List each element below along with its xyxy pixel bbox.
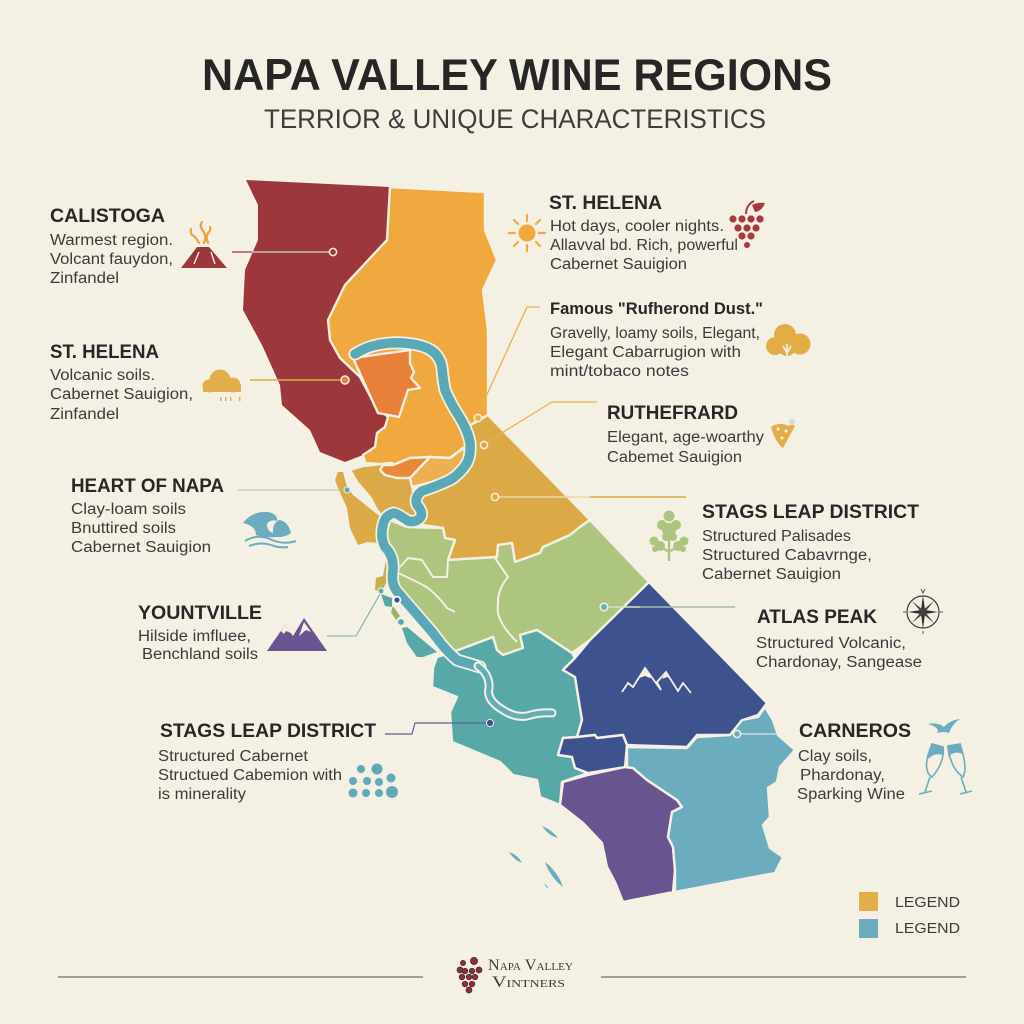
- marker: white ringed navy dot: [394, 597, 400, 603]
- callout: Calistoga: Zinfandel: [50, 270, 119, 287]
- leader: Famous Rutherford Dust: [474, 307, 540, 422]
- icon: mountains on blue region: [622, 668, 691, 693]
- region: gold west coast strip: [335, 472, 384, 545]
- callout: Calistoga: Warmest region.: [50, 232, 173, 249]
- logo: wordmark: [488, 957, 573, 991]
- callout: Yountville: YOUNTVILLE: [138, 602, 262, 624]
- callout: Rutherford: RUTHEFRARD: [607, 402, 738, 424]
- callout: Stags Leap west: is minerality: [158, 786, 246, 803]
- island three: [545, 862, 563, 887]
- callout: Stags Leap east: STAGS LEAP DISTRICT: [702, 501, 919, 523]
- marker: small teal dot: [398, 619, 404, 625]
- icon: mineral bubbles: [348, 764, 398, 798]
- map of regions: [243, 180, 795, 902]
- island four: [544, 883, 549, 888]
- callout: Stags Leap east: Structured Cabavrnge,: [702, 547, 872, 564]
- callout: St. Helena west: ST. HELENA: [50, 341, 159, 363]
- region: gold west: [350, 463, 420, 522]
- region: teal coastal strip: [402, 627, 437, 657]
- region: blue: [563, 582, 767, 747]
- region: dark orange pocket: [353, 350, 420, 417]
- icon: leaf: [650, 510, 688, 561]
- logo: grape mark: [457, 957, 482, 993]
- callout: Atlas Peak: Chardonay, Sangease: [756, 654, 922, 671]
- callout: Stags Leap west: [158, 720, 376, 803]
- callout: Famous Rutherford Dust: [550, 299, 763, 380]
- callout: Carneros: Clay soils,: [798, 748, 872, 765]
- callout: St. Helena east: [549, 192, 738, 273]
- callout: St. Helena west: Volcanic soils.: [50, 367, 155, 384]
- green inner borders: [398, 558, 517, 642]
- callout: St. Helena west: Zinfandel: [50, 406, 119, 423]
- callout: Calistoga: CALISTOGA: [50, 205, 165, 227]
- callout: Atlas Peak: ATLAS PEAK: [757, 606, 877, 628]
- callout: Stags Leap west: Structued Cabemion with: [158, 767, 342, 784]
- legend swatch gold: [859, 892, 878, 911]
- title: NAPA VALLEY WINE REGIONS: [202, 51, 832, 100]
- region: small blue: [558, 735, 627, 773]
- callout: Carneros: [797, 720, 911, 803]
- callout: Stags Leap west: Structured Cabernet: [158, 748, 309, 765]
- icon: compass: [903, 589, 943, 634]
- callout: Rutherford: Cabemet Sauigion: [607, 449, 742, 466]
- region: small orange patch: [380, 457, 430, 478]
- legend: [859, 892, 960, 938]
- region: green: [385, 520, 649, 655]
- callout: Heart of Napa: Bnuttired soils: [71, 520, 176, 537]
- logo: wordmark: Vintners: [492, 974, 565, 991]
- icon: toasting glasses: [919, 744, 972, 794]
- logo: wordmark: Napa Valley: [488, 957, 573, 974]
- icon: volcano: [181, 222, 227, 268]
- callout: Heart of Napa: Clay-loam soils: [71, 501, 186, 518]
- callout: St. Helena east: Cabernet Sauigion: [550, 256, 687, 273]
- islands: [509, 826, 563, 888]
- callout: Famous Rutherford Dust: mint/tobaco notes: [550, 363, 689, 380]
- region: coastal gold sliver: [375, 560, 388, 592]
- callout: Atlas Peak: Structured Volcanic,: [756, 635, 906, 652]
- leader: Heart of Napa: [238, 487, 350, 493]
- callout: Heart of Napa: Cabernet Sauigion: [71, 539, 211, 556]
- river lower: [478, 666, 552, 716]
- leader: Calistoga: [232, 248, 337, 256]
- river upper: [355, 343, 480, 667]
- leader: St. Helena west: [250, 376, 349, 384]
- icon: grapes: [729, 201, 765, 248]
- icon: sun: [509, 215, 545, 251]
- callout: St. Helena west: [50, 341, 193, 423]
- callout: Yountville: Hilside imfluee,: [138, 628, 251, 645]
- callout: St. Helena east: Hot days, cooler nights.: [550, 218, 724, 235]
- callout: St. Helena east: Allavval bd. Rich, powerful: [550, 237, 738, 254]
- icon: purple mountains: [267, 618, 327, 651]
- callout: Stags Leap east: Structured Palisades: [702, 528, 851, 545]
- region: red north: [243, 180, 390, 462]
- region: orange upper: [328, 187, 497, 465]
- callout: St. Helena west: Cabernet Sauigion,: [50, 386, 193, 403]
- callout: Carneros: Phardonay,: [800, 767, 885, 784]
- callout: Yountville: Benchland soils: [142, 646, 258, 663]
- island one: [542, 826, 558, 838]
- region: light orange patch: [410, 448, 467, 487]
- leader: Stags Leap east: [491, 493, 686, 501]
- region: light blue: [627, 707, 795, 892]
- callout: Stags Leap east: Cabernet Sauigion: [702, 566, 841, 583]
- callout: Calistoga: [50, 205, 173, 287]
- leader: Carneros: [733, 730, 778, 738]
- region: coastal olive patch: [391, 606, 400, 620]
- callout: Heart of Napa: [71, 475, 224, 556]
- callout: Carneros: CARNEROS: [799, 720, 911, 742]
- icon: wave: [243, 512, 296, 547]
- legend label one: LEGEND: [895, 894, 960, 911]
- legend label two: LEGEND: [895, 920, 960, 937]
- leader: Stags Leap west: [385, 719, 494, 734]
- callout: Rutherford: [607, 402, 764, 466]
- leader: Atlas Peak: [600, 603, 735, 611]
- callout: Famous Rutherford Dust: Gravelly, loamy soils, Elegant,: [550, 325, 760, 342]
- subtitle: TERRIOR & UNIQUE CHARACTERISTICS: [264, 104, 766, 134]
- region: gold east: [417, 415, 590, 562]
- legend swatch blue: [859, 919, 878, 938]
- callout: Atlas Peak: [756, 606, 922, 671]
- callout: Carneros: Sparking Wine: [797, 786, 905, 803]
- callout: Calistoga: Volcant fauydon,: [50, 251, 173, 268]
- callout: Heart of Napa: HEART OF NAPA: [71, 475, 224, 497]
- callout: Rutherford: Elegant, age-woarthy: [607, 429, 764, 446]
- region: teal: [432, 630, 588, 805]
- footer rule left: [58, 976, 423, 978]
- callout: Stags Leap east: [702, 501, 919, 583]
- icon: bird: [928, 719, 960, 733]
- icon: grape cluster heart: [771, 419, 795, 448]
- callout: Famous Rutherford Dust: Elegant Cabarrugion with: [550, 344, 741, 361]
- callout: St. Helena east: ST. HELENA: [549, 192, 662, 214]
- footer rule right: [601, 976, 966, 978]
- leader: Rutherford: [480, 402, 597, 449]
- region: purple: [560, 767, 682, 902]
- callout: Yountville: [138, 602, 262, 663]
- icon: tree: [766, 324, 810, 360]
- callout: Famous Rutherford Dust: Famous "Rufherond Dust.": [550, 299, 763, 318]
- callout: Stags Leap west: STAGS LEAP DISTRICT: [160, 720, 376, 742]
- leader lines and dots: [232, 248, 778, 738]
- region: coastal teal patch: [381, 594, 392, 607]
- island two: [509, 852, 522, 863]
- icon: rain cloud: [202, 370, 241, 401]
- leader: Yountville: [327, 588, 384, 636]
